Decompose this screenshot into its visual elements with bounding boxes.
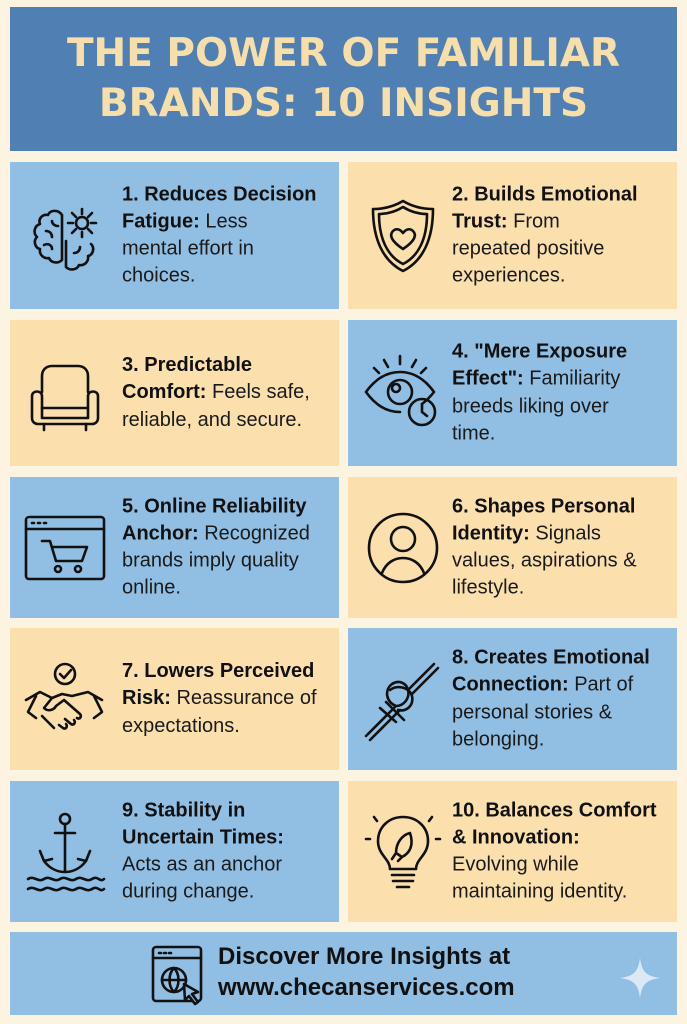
icon: bulb rocket	[364, 816, 442, 888]
text: personal stories &	[452, 701, 612, 723]
text	[452, 183, 638, 287]
text: Comfort: Feels safe,	[122, 381, 310, 403]
text: online.	[122, 577, 181, 599]
panel: 7 perceived risk	[10, 628, 339, 770]
panel: 5 online reliability	[10, 477, 339, 618]
icon: person circle	[368, 512, 438, 584]
text: 7. Lowers Perceived	[122, 660, 314, 682]
text: 2. Builds Emotional	[452, 183, 638, 205]
text: 1. Reduces Decision	[122, 183, 317, 205]
text: expectations.	[122, 715, 240, 737]
panel: 6 personal identity	[348, 477, 677, 618]
text: 4. "Mere Exposure	[452, 340, 627, 362]
text: belonging.	[452, 728, 544, 750]
text	[122, 354, 310, 431]
text	[452, 340, 627, 444]
text: during change.	[122, 881, 254, 903]
text: lifestyle.	[452, 577, 524, 599]
title	[10, 7, 677, 151]
icon: shield heart	[372, 200, 434, 272]
text	[122, 495, 310, 599]
icon: browser cart	[24, 516, 106, 580]
text: values, aspirations &	[452, 550, 637, 572]
text: mental effort in	[122, 238, 254, 260]
text	[122, 660, 317, 737]
panel: 2 emotional trust	[348, 162, 677, 309]
text: Risk: Reassurance of	[122, 687, 317, 709]
icon: handshake check	[24, 662, 104, 730]
footer text: www.checanservices.com	[218, 974, 515, 1001]
icon: brain gear	[33, 208, 98, 271]
icon: eye clock	[364, 354, 436, 426]
text	[452, 646, 650, 750]
panel: 1 decision fatigue	[10, 162, 339, 309]
icon: knot	[364, 662, 440, 742]
title: THE POWER OF FAMILIAR	[67, 31, 620, 76]
text: 8. Creates Emotional	[452, 646, 650, 668]
text: Uncertain Times:	[122, 826, 284, 848]
icon: sparkle	[620, 958, 660, 998]
icon: anchor waves	[26, 812, 106, 892]
panel: 3 predictable comfort	[10, 320, 339, 466]
text: Trust: From	[452, 210, 560, 232]
text: 9. Stability in	[122, 799, 245, 821]
text: 10. Balances Comfort	[452, 799, 657, 821]
panel: 10 comfort innovation	[348, 781, 677, 922]
title: BRANDS: 10 INSIGHTS	[99, 81, 588, 126]
text: Effect": Familiarity	[452, 368, 620, 390]
text: & Innovation:	[452, 826, 580, 848]
text: 3. Predictable	[122, 354, 252, 376]
text: 5. Online Reliability	[122, 495, 306, 517]
text: 6. Shapes Personal	[452, 495, 635, 517]
text	[122, 183, 317, 287]
text: Connection: Part of	[452, 674, 633, 696]
panel: 8 emotional connection	[348, 628, 677, 770]
text	[122, 799, 284, 903]
text: repeated positive	[452, 238, 604, 260]
text: brands imply quality	[122, 550, 299, 572]
footer	[10, 932, 677, 1015]
text: Evolving while	[452, 854, 579, 876]
text: time.	[452, 422, 495, 444]
text: reliable, and secure.	[122, 409, 302, 431]
text: Identity: Signals	[452, 522, 601, 544]
panel: 4 mere exposure	[348, 320, 677, 466]
text	[452, 495, 637, 599]
text: maintaining identity.	[452, 881, 627, 903]
panel: 9 stability	[10, 781, 339, 922]
text: breeds liking over	[452, 395, 609, 417]
text: Acts as an anchor	[122, 854, 282, 876]
footer text: Discover More Insights at	[218, 943, 510, 970]
text: choices.	[122, 265, 195, 287]
footer text	[218, 943, 515, 1001]
text: Anchor: Recognized	[122, 522, 310, 544]
icon: armchair	[30, 364, 100, 432]
text: Fatigue: Less	[122, 210, 248, 232]
text	[452, 799, 657, 903]
icon: browser globe cursor	[152, 946, 202, 1006]
text: experiences.	[452, 265, 565, 287]
